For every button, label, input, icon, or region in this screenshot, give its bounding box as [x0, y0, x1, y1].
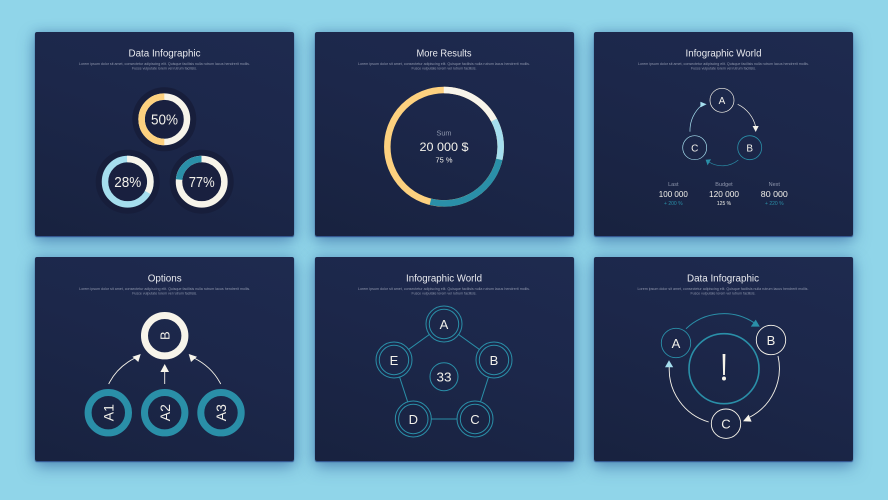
heading	[358, 273, 530, 296]
stat: last	[659, 182, 688, 207]
heading: Lorem ipsum dolor sit amet, consectetur adipiscing elit. Quisque facilisis nulla rutrum lacus hendrerit mollis.	[358, 287, 530, 291]
node B	[756, 325, 786, 355]
arrow A to B	[686, 314, 760, 329]
heading: Lorem ipsum dolor sit amet, consectetur adipiscing elit. Quisque facilisis nulla rutrum lacus hendrerit mollis.	[79, 287, 250, 291]
arrow A3 to B	[189, 354, 221, 384]
node A3: A3	[213, 404, 229, 421]
heading	[358, 48, 530, 71]
node A2	[144, 392, 185, 433]
node D: D	[409, 412, 418, 427]
node A1	[88, 392, 128, 433]
node B	[476, 342, 512, 378]
panel: infographic world cycle	[594, 32, 853, 236]
node B: B	[490, 353, 498, 368]
centre figures: Sum	[436, 131, 452, 138]
heading: Fusce vulputate lorem vel rutrum facilisis.	[132, 292, 197, 296]
node A3	[201, 392, 241, 433]
stat: last: Last	[668, 182, 679, 188]
arrow A2 to B	[160, 364, 169, 384]
heading	[79, 273, 250, 296]
node C	[711, 409, 741, 438]
node E: E	[390, 353, 399, 368]
donut 28%	[96, 150, 160, 214]
stat: next	[761, 182, 788, 207]
donut 50%	[132, 87, 196, 151]
heading: Fusce vulputate lorem vel rutrum facilisis.	[412, 67, 476, 71]
heading	[79, 48, 250, 71]
heading: Infographic World	[406, 273, 482, 284]
node A	[426, 306, 462, 342]
stat: next: Next	[769, 182, 780, 188]
panel: alert cycle	[594, 257, 853, 461]
node C: C	[470, 412, 480, 427]
heading	[638, 48, 809, 71]
donut 28%: 28%	[114, 175, 141, 191]
node B	[738, 136, 762, 160]
heading: Lorem ipsum dolor sit amet, consectetur adipiscing elit. Quisque facilisis nulla rutrum lacus hendrerit mollis.	[638, 287, 808, 291]
heading	[638, 273, 808, 296]
centre figures: 20 000 $	[420, 140, 469, 154]
arrow C to A	[665, 360, 709, 422]
node B: B	[157, 331, 172, 340]
heading: Options	[148, 273, 182, 284]
heading: Lorem ipsum dolor sit amet, consectetur adipiscing elit. Quisque facilisis nulla rutrum lacus hendrerit mollis.	[79, 62, 250, 66]
donut 77%: 77%	[189, 175, 215, 191]
node A2: A2	[157, 404, 173, 421]
node D	[395, 401, 431, 437]
centre alert	[689, 334, 759, 404]
stat: budget	[709, 182, 739, 207]
node A	[661, 328, 691, 358]
node B: B	[767, 333, 775, 348]
arrow A1 to B	[109, 354, 141, 384]
heading: Infographic World	[686, 48, 762, 59]
arrow B to C	[706, 159, 738, 166]
node B	[144, 316, 185, 356]
heading: Fusce vulputate lorem vel rutrum facilisis.	[690, 292, 756, 296]
arrow A to B	[738, 104, 759, 132]
heading: Fusce vulputate lorem vel rutrum facilisis.	[412, 292, 476, 296]
donut 77%	[170, 150, 234, 214]
node A: A	[719, 96, 726, 107]
centre value	[430, 363, 458, 391]
node A	[710, 88, 734, 112]
stat: last: + 200 %	[664, 201, 683, 207]
heading: Fusce vulputate lorem vel rutrum facilisis.	[132, 67, 197, 71]
arrow C to A	[690, 102, 707, 132]
stat: budget: 125 %	[717, 201, 732, 207]
node C: C	[721, 416, 731, 432]
panel: more results	[315, 32, 574, 236]
heading: More Results	[416, 48, 472, 59]
node A: A	[672, 336, 681, 351]
stat: budget: Budget	[715, 182, 733, 188]
heading: Lorem ipsum dolor sit amet, consectetur adipiscing elit. Quisque facilisis nulla rutrum lacus hendrerit mollis.	[638, 62, 809, 66]
heading: Fusce vulputate lorem vel rutrum facilisis.	[691, 67, 756, 71]
donut 50%: 50%	[151, 112, 178, 128]
stat: budget: 120 000	[709, 189, 739, 199]
stat: next: + 220 %	[765, 201, 784, 207]
stat: next: 80 000	[761, 189, 788, 199]
node E	[376, 342, 412, 378]
node B: B	[746, 143, 753, 154]
large segmented ring	[387, 90, 501, 203]
node C	[457, 401, 493, 437]
node A: A	[440, 317, 449, 332]
connecting pentagon lines	[394, 324, 494, 419]
heading: Data Infographic	[687, 273, 759, 284]
heading: Data Infographic	[128, 48, 200, 59]
heading: Lorem ipsum dolor sit amet, consectetur adipiscing elit. Quisque facilisis nulla rutrum lacus hendrerit mollis.	[358, 62, 530, 66]
node C	[683, 136, 707, 160]
node A1: A1	[100, 404, 116, 421]
centre figures	[420, 131, 469, 164]
node C: C	[691, 143, 698, 154]
centre figures: 75 %	[436, 157, 452, 164]
panel: pentagon network	[315, 257, 574, 461]
centre value: 33	[436, 370, 452, 384]
arrow B to C	[743, 356, 779, 422]
stat: last: 100 000	[659, 189, 688, 199]
panel: data infographic donuts	[35, 32, 294, 236]
panel: options	[35, 257, 294, 461]
